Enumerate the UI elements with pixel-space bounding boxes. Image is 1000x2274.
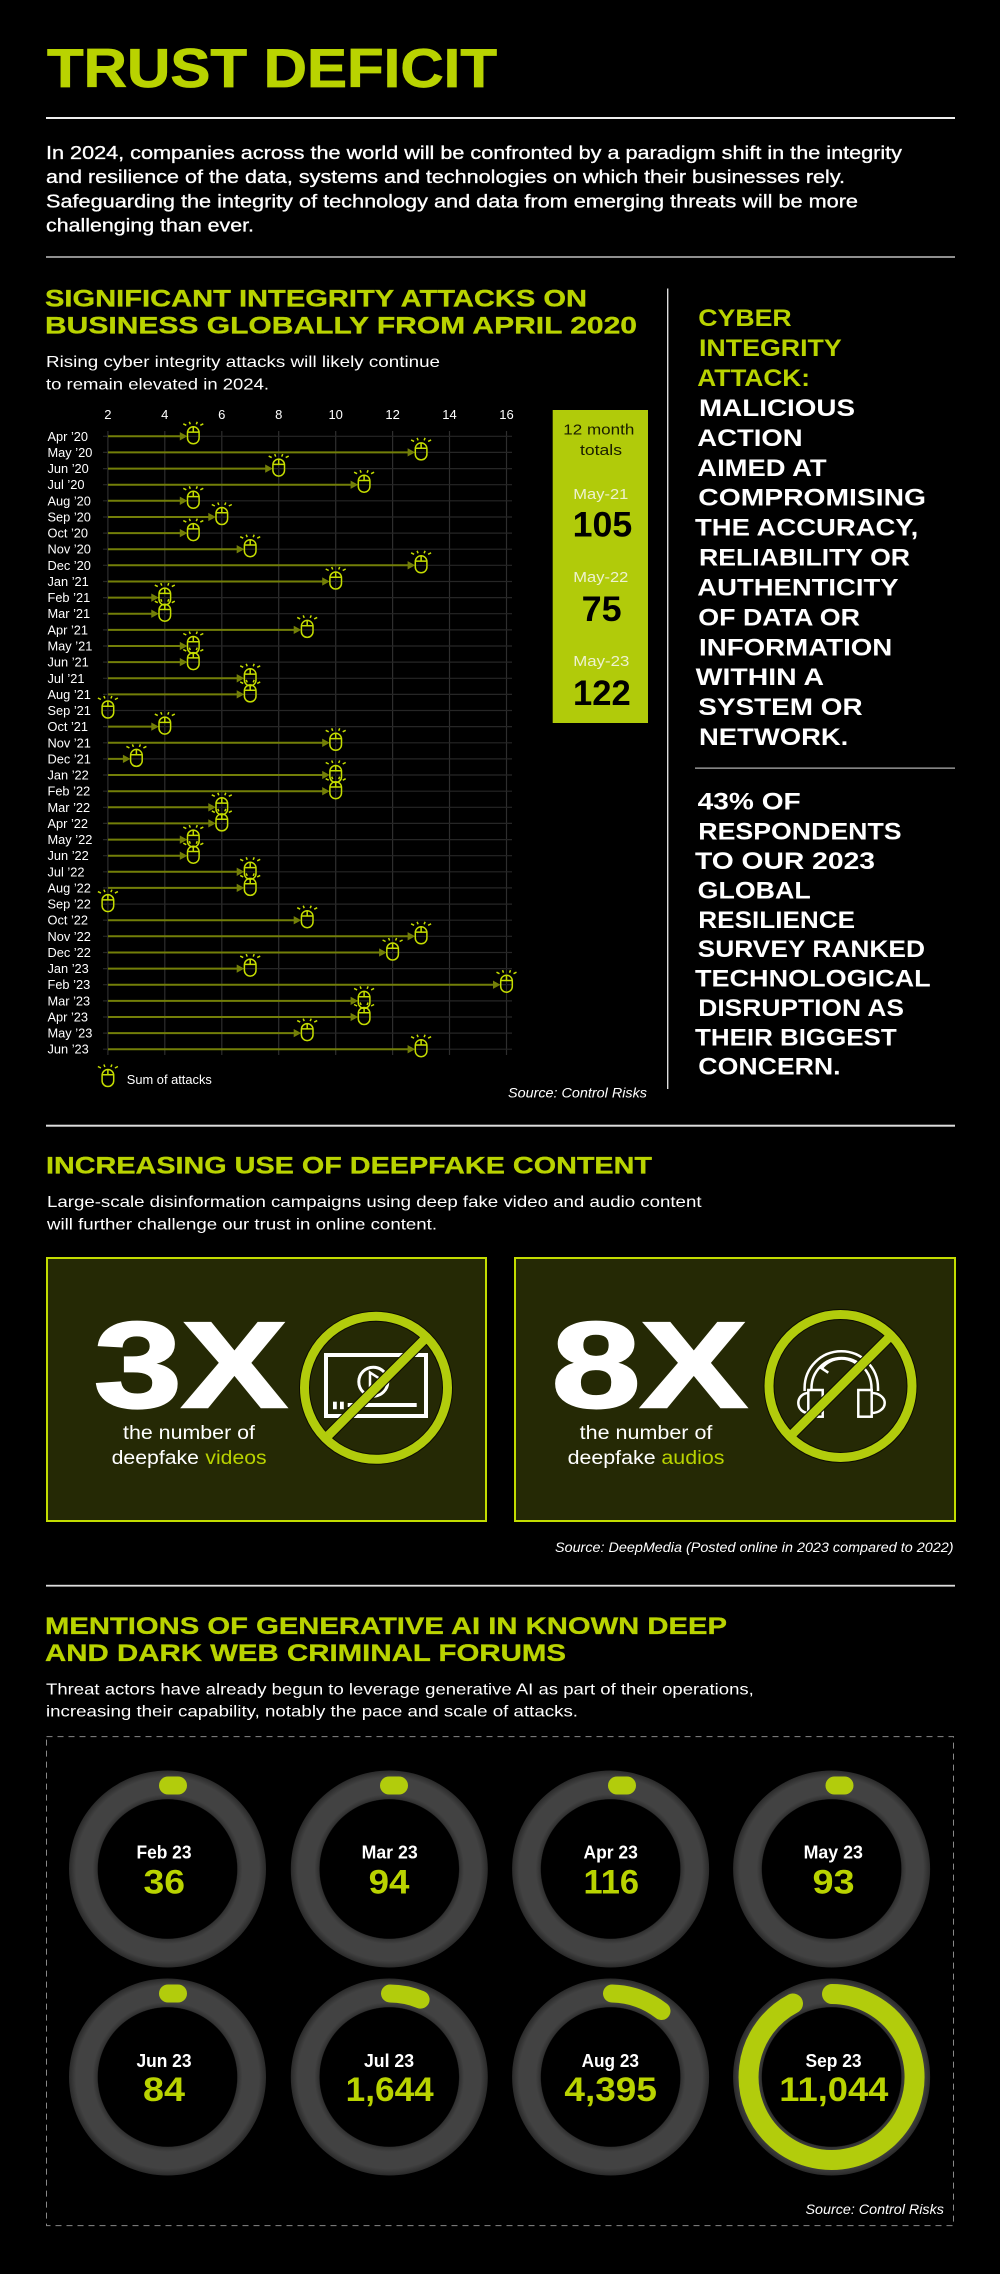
ring: Sep 23: 11,044 <box>779 2071 888 2109</box>
row: Apr 22, 6 attacks <box>48 809 232 831</box>
integrity attacks description: Rising cyber integrity attacks will likely continue <box>46 354 440 371</box>
row: Jun 20, 8 attacks: Jun ’20 <box>48 461 89 476</box>
row: Feb 21, 4 attacks: Feb ’21 <box>48 590 90 605</box>
row: Nov 21, 10 attacks: Nov ’21 <box>48 735 91 750</box>
row: May 23, 9 attacks <box>48 1019 317 1041</box>
row: Jul 20, 11 attacks: Jul ’20 <box>48 477 84 492</box>
row: Nov 21, 10 attacks <box>48 728 346 750</box>
row: Oct 20, 5 attacks <box>48 519 203 541</box>
row: Nov 20, 7 attacks: Nov ’20 <box>48 542 91 557</box>
definition: cyber integrity attack: WITHIN A <box>696 664 824 691</box>
definition: cyber integrity attack: OF DATA OR <box>698 605 860 632</box>
stat: 43 percent of respondents: CONCERN. <box>698 1054 841 1080</box>
definition: cyber integrity attack: NETWORK. <box>699 724 848 751</box>
row: Mar 22, 6 attacks: Mar ’22 <box>48 800 90 815</box>
row: Mar 23, 11 attacks: Mar ’23 <box>48 993 90 1008</box>
icon: prohibited video <box>304 1316 448 1459</box>
row: Nov 22, 13 attacks <box>48 922 431 944</box>
stat: 43 percent of respondents: 43% OF <box>698 788 801 815</box>
ring: Feb 23: Feb 23 <box>136 1843 192 1863</box>
panel: 12 month totals: 105 <box>573 506 632 545</box>
ring: Aug 23: Aug 23 <box>582 2051 639 2071</box>
deepfake description <box>46 1194 702 1233</box>
panel: deepfake audios <box>515 1258 955 1521</box>
row: May 23, 9 attacks: May ’23 <box>48 1026 92 1041</box>
row: Jul 21, 7 attacks <box>48 664 260 686</box>
ring: Aug 23: 4,395 <box>564 2071 657 2109</box>
row: Apr 21, 9 attacks: Apr ’21 <box>48 622 88 637</box>
row: Dec 21, 3 attacks <box>48 744 146 766</box>
chart x axis <box>104 407 514 422</box>
row: Jun 21, 5 attacks: Jun ’21 <box>48 655 89 670</box>
panel: 12 month totals: 12 month <box>563 421 634 438</box>
ring: Mar 23: Mar 23 <box>362 1843 418 1863</box>
row: Sep 20, 6 attacks <box>48 502 232 524</box>
panel: monthly mentions rings <box>46 1737 954 2226</box>
row: Apr 23, 11 attacks <box>48 1002 374 1024</box>
row: Jun 20, 8 attacks <box>48 454 289 476</box>
stat: 8X: 8X <box>552 1297 747 1433</box>
caption: deepfake videos: deepfake <box>112 1448 199 1469</box>
row: Sep 21, 2 attacks <box>48 696 118 718</box>
ring: Apr 23: 116 <box>584 1863 639 1901</box>
panel: 12 month totals: May-21 <box>573 486 628 503</box>
row: Jul 21, 7 attacks: Jul ’21 <box>48 671 84 686</box>
icon: prohibited headphones <box>769 1314 912 1458</box>
row: Apr 20, 5 attacks: Apr ’20 <box>48 429 88 444</box>
chart x axis: 12 <box>385 407 400 422</box>
caption: deepfake audios <box>568 1423 724 1469</box>
panel: 12 month totals: May-23 <box>573 653 629 670</box>
row: Mar 21, 4 attacks <box>48 599 175 621</box>
integrity attacks description: to remain elevated in 2024. <box>46 376 269 394</box>
caption: deepfake videos: the number of <box>123 1423 256 1444</box>
ring: May 23: 93 <box>812 1863 855 1901</box>
chart: sum of attacks by month <box>48 407 516 1057</box>
deepfake description: Large-scale disinformation campaigns using deep fake video and audio content <box>47 1194 702 1211</box>
row: Jan 22, 10 attacks: Jan ’22 <box>48 768 89 782</box>
row: Jan 21, 10 attacks <box>48 567 346 589</box>
row: Oct 22, 9 attacks <box>48 906 317 928</box>
panel: 12 month totals <box>553 410 648 723</box>
definition: cyber integrity attack: COMPROMISING <box>698 485 926 512</box>
ring: May 23: May 23 <box>804 1843 863 1863</box>
definition: cyber integrity attack: RELIABILITY OR <box>699 545 910 572</box>
row: Jan 23, 7 attacks: Jan ’23 <box>48 961 89 976</box>
row: Oct 20, 5 attacks: Oct ’20 <box>48 526 88 541</box>
ring: Mar 23: 94 <box>369 1863 409 1901</box>
row: May 20, 13 attacks <box>48 438 431 460</box>
row: Dec 20, 13 attacks: Dec ’20 <box>48 558 91 573</box>
integrity attacks description <box>46 354 440 394</box>
generative AI description: increasing their capability, notably the pace and scale of attacks. <box>46 1703 578 1720</box>
heading: deepfake content: INCREASING USE OF DEEPFAKE CONTENT <box>46 1152 652 1179</box>
row: Aug 21, 7 attacks <box>48 680 260 702</box>
ring: Jul 23: Jul 23 <box>364 2051 414 2071</box>
row: Apr 21, 9 attacks <box>48 615 317 637</box>
ring: Jul 23 <box>291 1978 488 2176</box>
row: Aug 21, 7 attacks: Aug ’21 <box>48 687 91 702</box>
ring: Feb 23 <box>69 1770 266 1968</box>
caption: deepfake videos: videos <box>205 1448 267 1469</box>
stat: 43 percent of respondents: TO OUR 2023 <box>695 848 875 875</box>
row: Jan 23, 7 attacks <box>48 954 260 976</box>
chart x axis: 8 <box>275 407 282 422</box>
row: Jun 23, 13 attacks <box>48 1035 431 1057</box>
chart x axis: 14 <box>442 407 457 422</box>
heading: integrity attacks: SIGNIFICANT INTEGRITY ATTACKS ON <box>45 286 587 313</box>
row: Sep 20, 6 attacks: Sep ’20 <box>48 510 91 524</box>
definition: cyber integrity attack: MALICIOUS <box>699 395 855 422</box>
row: Jun 21, 5 attacks <box>48 648 203 670</box>
row: Nov 20, 7 attacks <box>48 535 260 557</box>
intro text: and resilience of the data, systems and technologies on which their businesses rely. <box>46 166 845 187</box>
row: Aug 20, 5 attacks: Aug ’20 <box>48 493 91 508</box>
intro text: In 2024, companies across the world will be confronted by a paradigm shift in the integrity <box>46 142 903 163</box>
generative AI description <box>46 1681 754 1720</box>
ring: Jun 23 <box>69 1978 266 2176</box>
row: Jan 21, 10 attacks: Jan ’21 <box>48 574 89 589</box>
panel: 12 month totals: 122 <box>573 674 631 713</box>
row: May 21, 5 attacks: May ’21 <box>48 638 92 654</box>
chart legend <box>98 1064 212 1087</box>
stat: 43 percent of respondents: SURVEY RANKED <box>698 936 925 963</box>
row: Aug 22, 7 attacks <box>48 873 260 895</box>
row: Jul 22, 7 attacks <box>48 857 260 879</box>
heading: generative AI mentions: AND DARK WEB CRIMINAL FORUMS <box>45 1640 566 1667</box>
definition: cyber integrity attack: SYSTEM OR <box>698 694 863 721</box>
row: Apr 20, 5 attacks <box>48 422 203 444</box>
definition: cyber integrity attack <box>695 305 926 751</box>
title: TRUST DEFICIT <box>47 37 497 99</box>
row: Dec 22, 12 attacks: Dec ’22 <box>48 945 91 960</box>
heading: generative AI mentions: MENTIONS OF GENERATIVE AI IN KNOWN DEEP <box>45 1613 727 1640</box>
ring: Feb 23: 36 <box>144 1863 185 1901</box>
generative AI description: Threat actors have already begun to leverage generative AI as part of their operations, <box>46 1681 754 1698</box>
row: May 21, 5 attacks <box>48 632 203 654</box>
row: May 20, 13 attacks: May ’20 <box>48 445 92 460</box>
ring: Apr 23 <box>512 1770 709 1968</box>
stat: 43 percent of respondents: RESPONDENTS <box>698 818 902 845</box>
definition: cyber integrity attack: CYBER <box>698 305 792 332</box>
definition: cyber integrity attack: AIMED AT <box>697 455 827 482</box>
stat: 43 percent of respondents: RESILIENCE <box>698 907 855 934</box>
definition: cyber integrity attack: INFORMATION <box>699 635 892 662</box>
chart x axis: 4 <box>161 407 168 422</box>
stat: 43 percent of respondents: DISRUPTION AS <box>698 995 904 1022</box>
heading: integrity attacks: BUSINESS GLOBALLY FROM APRIL 2020 <box>45 313 637 340</box>
row: Oct 21, 4 attacks: Oct ’21 <box>48 719 88 734</box>
definition: cyber integrity attack: ATTACK: <box>697 365 810 392</box>
ring: Jun 23: Jun 23 <box>136 2051 192 2071</box>
ring: Apr 23: Apr 23 <box>584 1843 638 1863</box>
stat: 3X: 3X <box>94 1297 287 1433</box>
row: Oct 22, 9 attacks: Oct ’22 <box>48 913 88 928</box>
chart legend: Sum of attacks <box>127 1072 212 1087</box>
heading: integrity attacks <box>45 286 637 340</box>
panel: 12 month totals: totals <box>580 442 622 459</box>
ring: Mar 23 <box>291 1770 488 1968</box>
row: Apr 23, 11 attacks: Apr ’23 <box>48 1010 88 1024</box>
ring: Jul 23: 1,644 <box>346 2071 434 2109</box>
definition: cyber integrity attack: THE ACCURACY, <box>695 515 918 542</box>
ring: Sep 23: Sep 23 <box>806 2051 862 2071</box>
heading: generative AI mentions <box>45 1613 727 1667</box>
row: Jun 22, 5 attacks <box>48 841 203 863</box>
row: Nov 22, 13 attacks: Nov ’22 <box>48 929 91 944</box>
row: Sep 21, 2 attacks: Sep ’21 <box>48 703 91 718</box>
source: control risks: Source: Control Risks <box>508 1086 647 1100</box>
stat: 43 percent of respondents: TECHNOLOGICAL <box>695 966 931 993</box>
row: Jun 22, 5 attacks: Jun ’22 <box>48 848 89 863</box>
row: Oct 21, 4 attacks <box>48 712 175 734</box>
caption: deepfake audios: deepfake <box>568 1448 656 1469</box>
row: May 22, 5 attacks: May ’22 <box>48 832 92 847</box>
row: Feb 23, 16 attacks <box>48 970 516 992</box>
row: Jul 22, 7 attacks: Jul ’22 <box>48 864 84 879</box>
definition: cyber integrity attack: ACTION <box>697 425 803 452</box>
definition: cyber integrity attack: INTEGRITY <box>699 335 842 362</box>
ring: May 23 <box>733 1770 930 1968</box>
intro text: challenging than ever. <box>46 214 254 236</box>
row: Feb 23, 16 attacks: Feb ’23 <box>48 977 90 992</box>
chart x axis: 6 <box>218 407 225 422</box>
row: Jul 20, 11 attacks <box>48 470 374 492</box>
row: Mar 21, 4 attacks: Mar ’21 <box>48 606 90 621</box>
ring: Aug 23 <box>512 1978 709 2176</box>
stat: 43 percent of respondents <box>695 788 931 1080</box>
intro text: Safeguarding the integrity of technology and data from emerging threats will be more <box>46 190 858 212</box>
chart x axis: 10 <box>328 407 343 422</box>
source: deepmedia: Source: DeepMedia (Posted online in 2023 compared to 2022) <box>555 1540 954 1555</box>
deepfake description: will further challenge our trust in online content. <box>46 1216 437 1233</box>
panel: deepfake videos <box>47 1258 486 1521</box>
stat: 43 percent of respondents: GLOBAL <box>698 877 811 904</box>
row: Aug 20, 5 attacks <box>48 486 203 508</box>
row: Feb 22, 10 attacks <box>48 777 346 799</box>
caption: deepfake audios: the number of <box>580 1423 713 1444</box>
intro text <box>46 142 903 236</box>
source: control risks forums: Source: Control Risks <box>806 2202 944 2217</box>
caption: deepfake audios: audios <box>661 1448 724 1469</box>
row: Jun 23, 13 attacks: Jun ’23 <box>48 1042 89 1057</box>
row: Jan 22, 10 attacks <box>48 760 346 782</box>
ring: Sep 23 <box>733 1978 930 2176</box>
row: Mar 23, 11 attacks <box>48 986 374 1008</box>
row: Aug 22, 7 attacks: Aug ’22 <box>48 880 91 895</box>
definition: cyber integrity attack: AUTHENTICITY <box>697 575 899 602</box>
row: Apr 22, 6 attacks: Apr ’22 <box>48 816 88 831</box>
stat: 43 percent of respondents: THEIR BIGGEST <box>695 1025 897 1052</box>
row: Dec 22, 12 attacks <box>48 938 403 960</box>
row: Dec 21, 3 attacks: Dec ’21 <box>48 751 91 766</box>
row: May 22, 5 attacks <box>48 825 203 847</box>
row: Sep 22, 2 attacks <box>48 890 118 912</box>
ring: Jun 23: 84 <box>143 2071 185 2109</box>
row: Sep 22, 2 attacks: Sep ’22 <box>48 897 91 912</box>
row: Dec 20, 13 attacks <box>48 551 431 573</box>
chart x axis: 2 <box>104 407 112 422</box>
row: Feb 21, 4 attacks <box>48 583 175 605</box>
panel: 12 month totals: 75 <box>582 590 622 629</box>
panel: 12 month totals: May-22 <box>573 569 628 586</box>
row: Feb 22, 10 attacks: Feb ’22 <box>48 784 90 799</box>
chart x axis: 16 <box>499 407 514 422</box>
caption: deepfake videos <box>112 1423 267 1469</box>
row: Mar 22, 6 attacks <box>48 793 232 815</box>
